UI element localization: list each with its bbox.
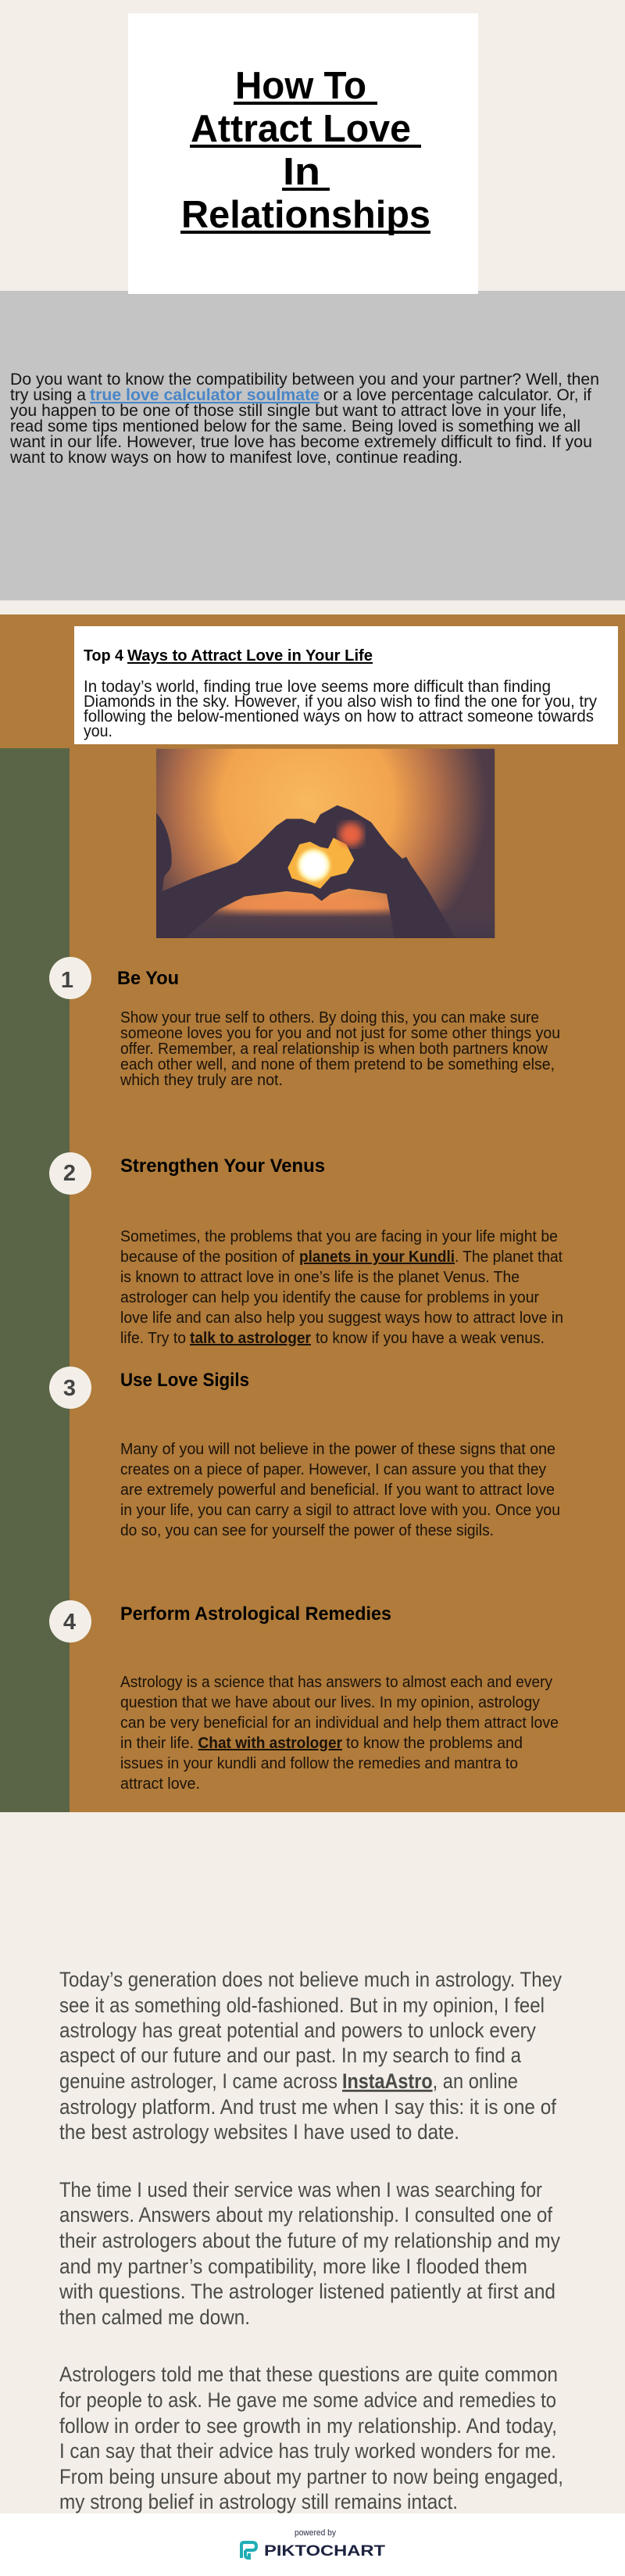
footer: powered by piktochart [0, 2513, 625, 2576]
text: use love sigils: are extremely powerful and beneficial. If you want to attract love [120, 1481, 555, 1499]
number badge 4 [49, 1600, 91, 1643]
piktochart wordmark: PIKTOCHART [264, 2542, 385, 2560]
text: strengthen your venus: . The planet that [455, 1249, 562, 1266]
intro text [9, 371, 599, 467]
text: strengthen your venus: love life and can also help you suggest ways how to attract love in [120, 1309, 563, 1327]
intro text: Do you want to know the compatibility between you and your partner? Well, then [10, 371, 599, 389]
panel: introduction [0, 291, 625, 600]
text block: personal story [59, 1968, 563, 2513]
text: perform astrological remedies: Astrology is a science that has answers to almost each and every [120, 1674, 552, 1691]
text: perform astrological remedies: Chat with astrologer [198, 1735, 342, 1752]
paragraph 1: astrology platform. And trust me when I say this: it is one of [59, 2095, 556, 2119]
text: perform astrological remedies: can be very beneficial for an individual and help them attract love [120, 1714, 559, 1732]
paragraph 2: then calmed me down. [59, 2306, 250, 2329]
text: be you: each other well, and none of them pretend to be something else, [120, 1056, 555, 1073]
paragraph 1: aspect of our future and our past. In my search to find a [59, 2044, 522, 2067]
text: strengthen your venus: to know if you have a weak venus. [316, 1330, 545, 1347]
text: perform astrological remedies: issues in your kundli and follow the remedies and mantra to [120, 1755, 518, 1772]
text: strengthen your venus: talk to astrologer [190, 1330, 311, 1347]
text: strengthen your venus: because of the position of [120, 1249, 295, 1266]
text: use love sigils [120, 1441, 560, 1539]
intro text: you happen to be one of those still single but want to attract love in your life, [10, 402, 566, 420]
text: be you: someone loves you for you and not just for some other things you [120, 1025, 560, 1042]
intro text: read some tips mentioned below for the same. Being loved is something we all [10, 417, 580, 435]
heading: perform astrological remedies: Perform Astrological Remedies [120, 1603, 391, 1625]
text: be you: Show your true self to others. By doing this, you can make sure [120, 1009, 539, 1026]
title: Relationships [181, 194, 430, 236]
paragraph 2: answers. Answers about my relationship. I consulted one of [59, 2203, 552, 2227]
title: How To [235, 65, 366, 107]
paragraph 1: InstaAstro [342, 2069, 433, 2093]
paragraph 1: genuine astrologer, I came across [59, 2069, 338, 2093]
number badge 4: 4 [63, 1610, 76, 1635]
heading: use love sigils: Use Love Sigils [120, 1370, 249, 1391]
paragraph 1: see it as something old-fashioned. But in my opinion, I feel [59, 1994, 545, 2017]
icon: piktochart logo [241, 2542, 256, 2558]
text: be you: which they truly are not. [120, 1072, 283, 1089]
text: strengthen your venus: Sometimes, the problems that you are facing in your life might be [120, 1228, 558, 1245]
image: hands forming a heart at sunset [156, 749, 495, 938]
title: In [283, 151, 320, 193]
intro text: true love calculator soulmate [90, 386, 320, 404]
paragraph 1: Today’s generation does not believe much in astrology. They [59, 1968, 562, 1991]
paragraph 1: astrology has great potential and powers to unlock every [59, 2019, 536, 2042]
number badge 1 [49, 957, 91, 999]
paragraph 1 [59, 1968, 562, 2144]
panel: title card [128, 13, 478, 294]
number badge 2: 2 [63, 1161, 76, 1186]
number badge 3: 3 [63, 1376, 76, 1401]
paragraph 3: for people to ask. He gave me some advice and remedies to [59, 2388, 556, 2412]
number badge 2 [49, 1152, 91, 1195]
heading: be you: Be You [117, 968, 179, 989]
text: use love sigils: do so, you can see for yourself the power of these sigils. [120, 1522, 494, 1539]
step 3: use love sigils [49, 1367, 560, 1539]
paragraph 2: The time I used their service was when I was searching for [59, 2178, 542, 2202]
panel: top 4 header card [74, 626, 618, 744]
text: be you: offer. Remember, a real relationship is when both partners know [120, 1041, 548, 1058]
text: strengthen your venus: life. Try to [120, 1330, 186, 1347]
text: be you [120, 1009, 560, 1089]
paragraph 1: , an online [433, 2069, 518, 2093]
step 1: be you [49, 957, 560, 1089]
intro text: or a love percentage calculator. Or, if [323, 386, 591, 404]
section intro text: you. [84, 722, 112, 740]
text: use love sigils: creates on a piece of paper. However, I can assure you that they [120, 1461, 546, 1478]
paragraph 3: I can say that their advice has truly worked wonders for me. [59, 2439, 556, 2463]
panel: ways to attract love [0, 614, 625, 1812]
text: use love sigils: Many of you will not believe in the power of these signs that one [120, 1441, 555, 1458]
number badge 3 [49, 1367, 91, 1409]
step 2: strengthen your venus [49, 1152, 563, 1347]
paragraph 2: and my partner’s compatibility, more like I flooded them [59, 2255, 527, 2278]
intro text: want to know ways on how to manifest love, continue reading. [9, 449, 462, 467]
paragraph 2 [59, 2178, 560, 2329]
paragraph 2: with questions. The astrologer listened patiently at first and [59, 2280, 555, 2303]
intro text: want in our life. However, true love has become extremely difficult to find. If you [9, 433, 592, 451]
section intro text: Diamonds in the sky. However, if you also wish to find the one for you, try [84, 693, 597, 711]
text: strengthen your venus: is known to attract love in one’s life is the planet Venus. The [120, 1269, 520, 1286]
heading: strengthen your venus: Strengthen Your Venus [120, 1155, 325, 1177]
title [180, 65, 430, 236]
title: Attract Love [191, 108, 411, 150]
intro text: try using a [10, 386, 86, 404]
text: use love sigils: in your life, you can carry a sigil to attract love with you. Once you [120, 1502, 560, 1519]
paragraph 3: my strong belief in astrology still remains intact. [59, 2490, 458, 2513]
step 4: perform astrological remedies [49, 1600, 559, 1793]
text: perform astrological remedies [120, 1674, 559, 1793]
paragraph 3 [59, 2363, 563, 2513]
paragraph 3: Astrologers told me that these questions are quite common [59, 2363, 558, 2386]
paragraph 3: follow in order to see growth in my relationship. And today, [59, 2414, 557, 2438]
text: perform astrological remedies: to know the problems and [346, 1735, 523, 1752]
number badge 1: 1 [61, 968, 73, 993]
section heading: Top 4 [84, 647, 124, 665]
section heading: Ways to Attract Love in Your Life [127, 647, 373, 665]
text: perform astrological remedies: attract love. [120, 1775, 200, 1793]
section intro text: In today’s world, finding true love seems more difficult than finding [84, 678, 551, 696]
text: strengthen your venus: planets in your Kundli [299, 1249, 455, 1266]
powered by label: powered by [295, 2528, 336, 2538]
text: strengthen your venus: astrologer can help you identify the cause for problems in your [120, 1289, 539, 1306]
text: perform astrological remedies: question that we have about our lives. In my opinion, astrology [120, 1694, 540, 1711]
section intro text [84, 678, 597, 740]
paragraph 2: their astrologers about the future of my relationship and my [59, 2229, 560, 2252]
text: strengthen your venus [120, 1228, 563, 1347]
paragraph 3: From being unsure about my partner to now being engaged, [59, 2465, 563, 2488]
paragraph 1: the best astrology websites I have used to date. [59, 2120, 459, 2144]
section intro text: following the below-mentioned ways on how to attract someone towards [84, 708, 594, 726]
text: perform astrological remedies: in their life. [120, 1735, 194, 1752]
